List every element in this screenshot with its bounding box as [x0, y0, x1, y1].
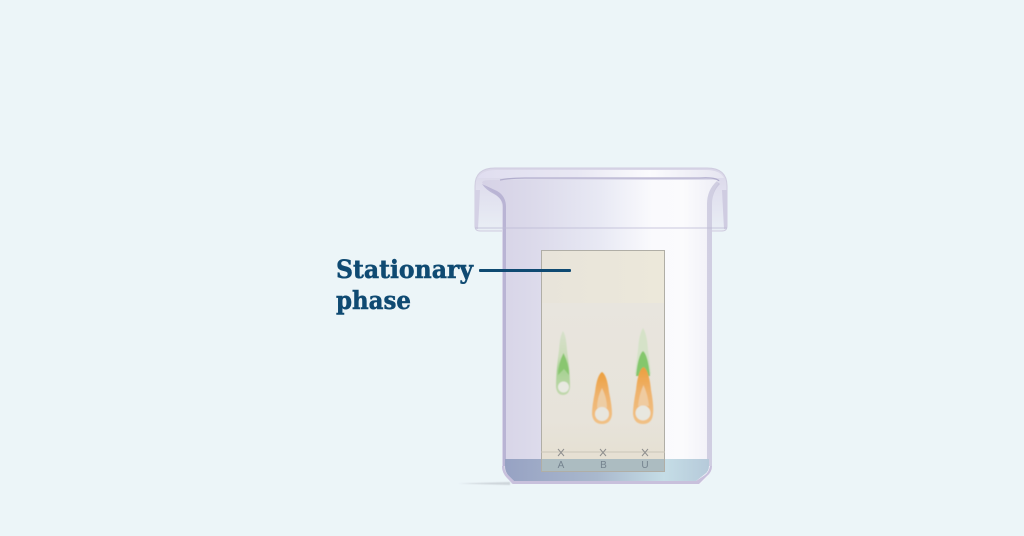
spot U: green and orange — [633, 328, 653, 424]
paper in liquid — [541, 459, 665, 472]
label B: B — [600, 460, 607, 471]
baseline — [541, 451, 665, 453]
label A: A — [558, 460, 565, 471]
stationary phase paper — [541, 250, 665, 472]
dry upper paper — [541, 250, 665, 303]
paper outline — [542, 250, 664, 472]
heading: Stationary phase: Stationary — [336, 255, 474, 284]
spot A: green — [556, 331, 570, 395]
beaker — [475, 168, 727, 484]
beaker left wall — [482, 184, 506, 466]
solvent-wetted lower paper — [541, 300, 665, 472]
right lip tab edge — [722, 190, 727, 229]
beaker body — [482, 180, 719, 484]
left lip tab edge — [475, 190, 480, 229]
liquid — [505, 459, 709, 481]
beaker base — [502, 466, 712, 484]
heading: Stationary phase: phase — [336, 286, 411, 315]
sample U marker — [642, 449, 648, 456]
label U: U — [641, 460, 649, 471]
callout leader line — [479, 269, 571, 272]
rim lower line — [475, 227, 727, 229]
rim top band — [478, 170, 724, 178]
beaker right wall — [707, 181, 720, 466]
spot B: orange — [592, 372, 612, 424]
shadow under beaker — [458, 482, 510, 485]
sample B marker — [600, 449, 606, 456]
beaker rim lip — [475, 168, 727, 231]
sample A marker — [558, 449, 564, 456]
rim inner line — [500, 178, 719, 181]
